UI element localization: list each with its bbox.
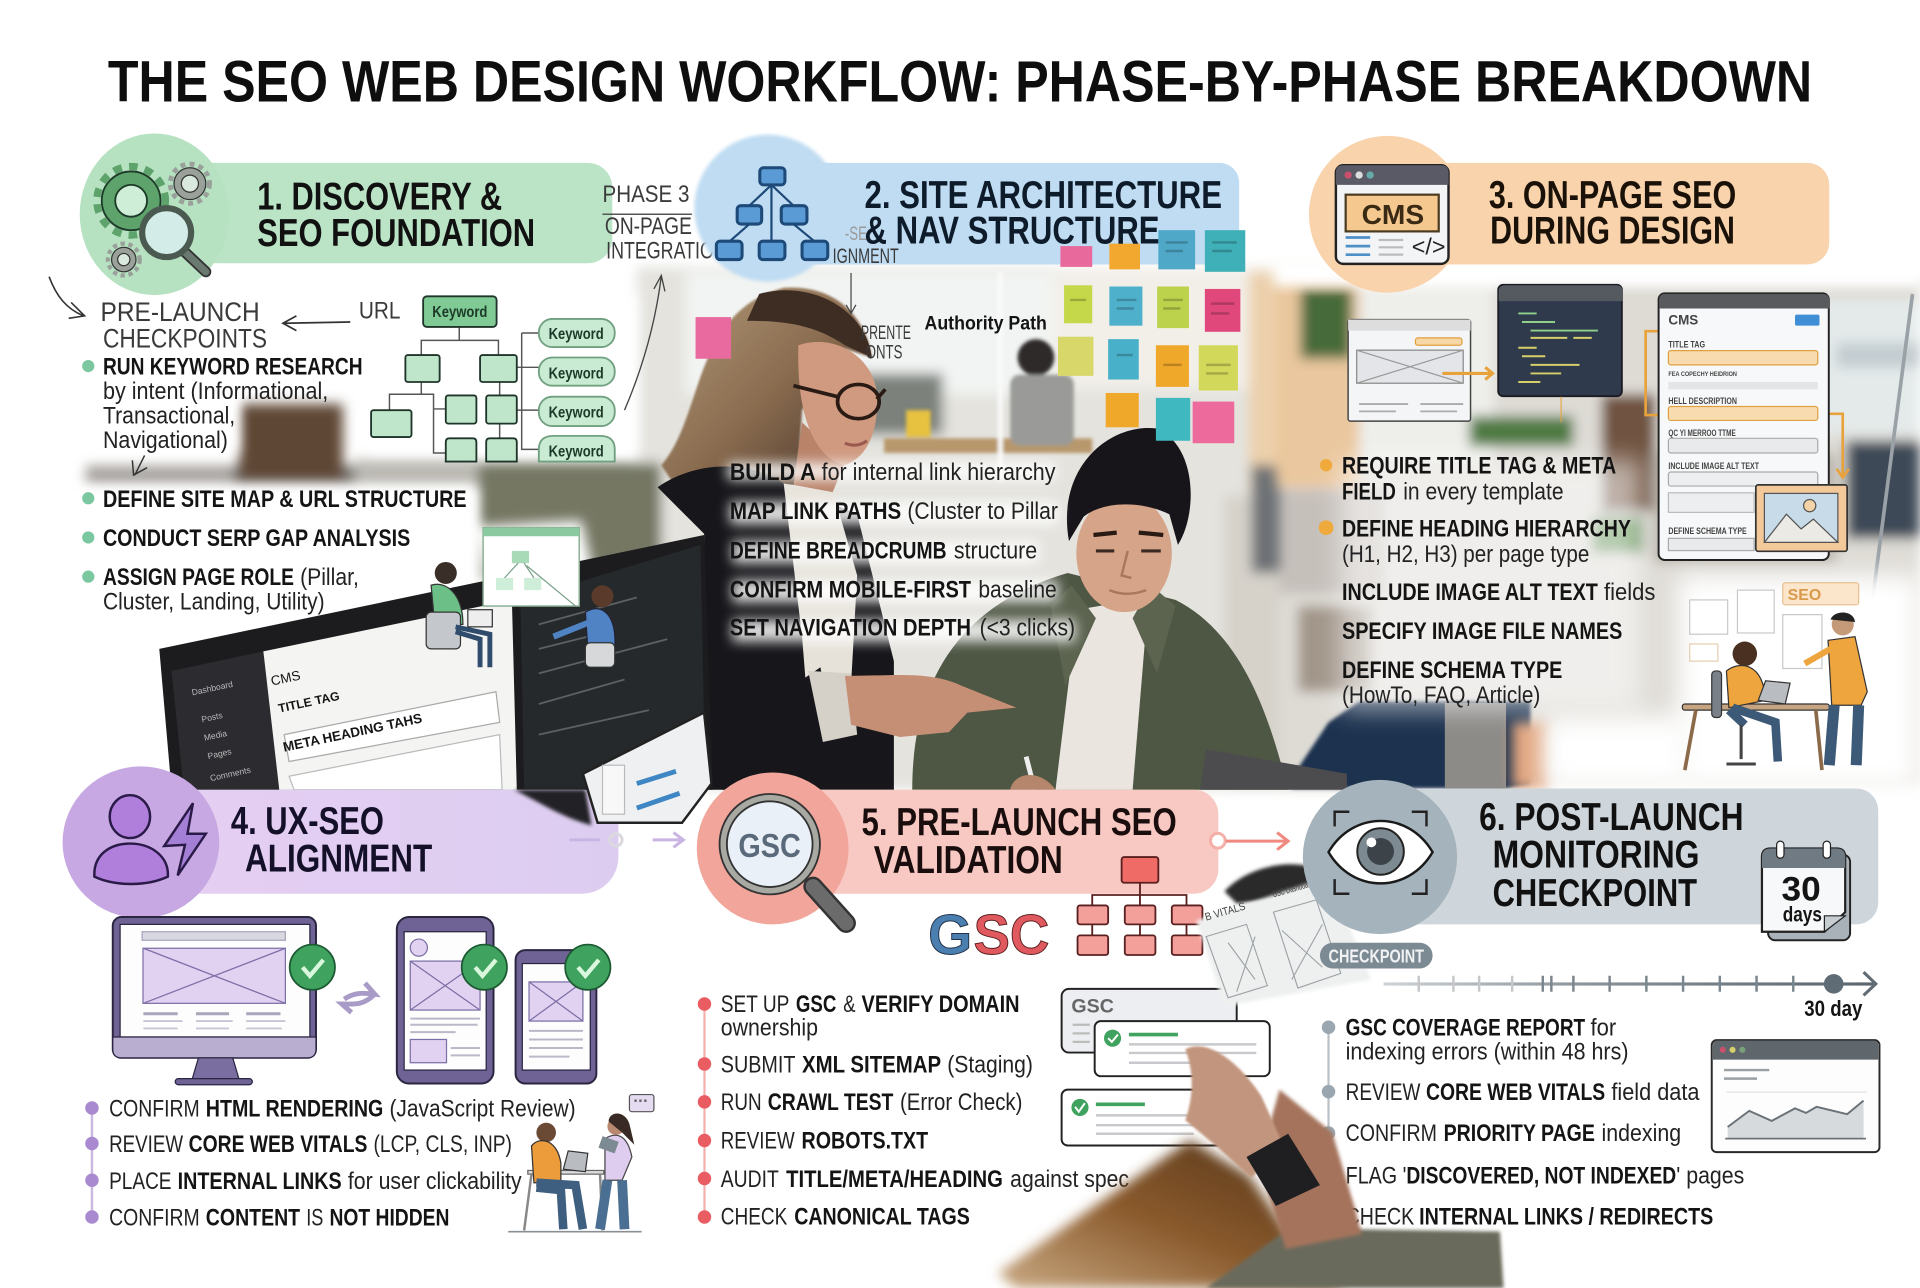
checklist xyxy=(730,459,1075,641)
checklist xyxy=(82,354,467,616)
photo: pointing arm xyxy=(722,667,1016,790)
checklist: CHECK xyxy=(1346,1203,1415,1230)
checklist: in every template xyxy=(1403,478,1564,505)
heading: 4. UX-SEO xyxy=(231,800,384,843)
CMS form window: TITLE TAG xyxy=(1668,340,1705,350)
checkpoint tag xyxy=(1320,943,1433,968)
checklist: AUDIT xyxy=(721,1166,779,1193)
checklist: CONFIRM MOBILE-FIRST xyxy=(730,576,971,603)
checklist: CORE WEB VITALS xyxy=(1426,1079,1605,1106)
phase 1 header band xyxy=(80,133,612,295)
wooden table xyxy=(998,1140,1347,1288)
handwritten fragments: ONTS xyxy=(866,342,902,364)
heading: ALIGNMENT xyxy=(245,838,432,881)
checklist: DEFINE HEADING HIERARCHY xyxy=(1342,515,1631,542)
checklist xyxy=(85,1096,576,1232)
GSC logo text xyxy=(928,903,1049,966)
checklist: REVIEW xyxy=(1346,1079,1421,1106)
monitor with CMS and code xyxy=(159,535,713,790)
handwritten fragments: IGNMENT xyxy=(833,245,899,268)
checklist: PLACE xyxy=(109,1168,172,1195)
heading xyxy=(257,175,535,255)
checklist: DEFINE SITE MAP & URL STRUCTURE xyxy=(103,486,467,513)
icon: desktop monitor wireframe xyxy=(113,917,316,1085)
checklist: baseline xyxy=(978,576,1057,603)
heading: SEO FOUNDATION xyxy=(257,212,535,255)
checklist: DEFINE BREADCRUMB xyxy=(730,537,947,564)
code window xyxy=(1498,285,1622,396)
authority path label: Authority Path xyxy=(924,313,1047,334)
handwritten fragments xyxy=(833,223,911,364)
icon: GSC magnifier xyxy=(720,794,846,923)
CMS form window xyxy=(1659,293,1829,560)
GSC logo text: SC xyxy=(973,903,1049,966)
CMS form window: CMS xyxy=(1668,312,1698,327)
heading: 1. DISCOVERY & xyxy=(257,175,502,218)
checklist: FIELD xyxy=(1342,478,1396,505)
checklist: (Staging) xyxy=(947,1052,1033,1079)
checklist: for internal link hierarchy xyxy=(822,459,1056,486)
icon: 30 days calendar xyxy=(1762,841,1850,940)
checklist: (Error Check) xyxy=(900,1089,1022,1116)
checklist: VERIFY DOMAIN xyxy=(862,991,1020,1018)
checklist: ownership xyxy=(721,1014,818,1041)
GSC report cards xyxy=(1062,989,1270,1145)
checklist: PRIORITY PAGE xyxy=(1444,1120,1595,1147)
handwritten pre-launch note: CHECKPOINTS xyxy=(103,324,267,354)
illustration: two people with desk and documents xyxy=(1682,583,1867,770)
checklist: TITLE/META/HEADING xyxy=(786,1166,1003,1193)
sketch paper with wireframes: B VITALS xyxy=(1204,901,1247,924)
heading: DURING DESIGN xyxy=(1490,210,1735,253)
keyword tree diagram: Keyword xyxy=(432,304,487,321)
timeline to 30 days: 30 day xyxy=(1804,996,1863,1021)
small laptop fragment over band 4 xyxy=(514,713,711,825)
panel 2: site architecture xyxy=(694,135,1245,641)
checklist: fields xyxy=(1604,579,1655,606)
analytics window with line chart xyxy=(1712,1040,1879,1152)
icon: small phone wireframe xyxy=(516,950,596,1084)
CMS form window: INCLUDE IMAGE ALT TEXT xyxy=(1668,461,1759,471)
checklist: NOT HIDDEN xyxy=(329,1205,449,1232)
handwritten phase 3 note: PHASE 3 xyxy=(602,181,689,208)
checklist: Cluster, Landing, Utility) xyxy=(103,589,325,616)
checklist xyxy=(1319,452,1655,709)
handwritten phase 3 note xyxy=(602,181,714,264)
monitor with CMS and code: Comments xyxy=(209,765,252,783)
CMS form window: DEFINE SCHEMA TYPE xyxy=(1668,526,1747,536)
handwritten phase 3 note: ON-PAGE xyxy=(605,213,692,240)
checklist: DEFINE SCHEMA TYPE xyxy=(1342,657,1562,684)
checklist xyxy=(1322,1014,1744,1230)
sketch paper with wireframes xyxy=(1196,864,1371,1006)
monitor with CMS and code: Pages xyxy=(207,746,232,761)
icon: gears and magnifier xyxy=(97,164,209,275)
illustration: two people at a whiteboard xyxy=(426,528,615,667)
CMS form window: FEA COPECHY HEIDRION xyxy=(1668,371,1737,378)
checklist: field data xyxy=(1611,1079,1700,1106)
checklist: CONDUCT SERP GAP ANALYSIS xyxy=(103,525,410,552)
keyword tree diagram: Keyword xyxy=(549,444,604,461)
monitor with CMS and code: META HEADING TAHS xyxy=(282,711,423,755)
photo: office background xyxy=(86,267,1353,790)
checklist xyxy=(698,991,1129,1230)
checklist: DISCOVERED, NOT INDEXED xyxy=(1406,1163,1676,1190)
handwritten pre-launch note: PRE-LAUNCH xyxy=(101,297,260,327)
panel 3: on-page seo xyxy=(1309,136,1867,770)
icon: CMS window: CMS xyxy=(1362,199,1424,230)
checklist: by intent (Informational, xyxy=(103,378,328,405)
checklist: BUILD A xyxy=(730,459,816,486)
panel 1: discovery xyxy=(49,133,714,667)
handwritten fragments: -SE xyxy=(845,223,867,245)
photo: right lounge area xyxy=(1276,279,1920,784)
photo: man at desk xyxy=(912,428,1347,790)
checklist: SUBMIT xyxy=(721,1052,795,1079)
site tree in red xyxy=(1078,857,1202,955)
checklist: (HowTo, FAQ, Article) xyxy=(1342,682,1540,709)
handwritten phase 3 note: INTEGRATIO xyxy=(606,237,714,264)
arrow: to phase 6 xyxy=(1210,833,1288,850)
sketch paper with wireframes: GSC Dashboard xyxy=(1271,878,1314,900)
handwritten pre-launch note: URL xyxy=(359,297,400,324)
checklist: Transactional, xyxy=(103,403,235,430)
checklist: CONFIRM xyxy=(109,1096,200,1123)
checklist: CANONICAL TAGS xyxy=(794,1203,970,1230)
heading: 3. ON-PAGE SEO xyxy=(1489,174,1736,217)
checklist: (JavaScript Review) xyxy=(389,1096,576,1123)
panel 5: pre-launch validation xyxy=(697,773,1371,1288)
white fade behind center list xyxy=(727,463,1075,642)
checklist: (H1, H2, H3) per page type xyxy=(1342,541,1589,568)
icon: CMS window xyxy=(1336,165,1449,264)
phase 5 header band xyxy=(697,773,1218,924)
heading xyxy=(862,801,1177,882)
checklist: ASSIGN PAGE ROLE xyxy=(103,564,294,591)
icon: 30 days calendar: days xyxy=(1783,904,1822,927)
checklist: (Pillar, xyxy=(300,564,359,591)
checklist: CONFIRM xyxy=(109,1205,200,1232)
checklist: structure xyxy=(954,537,1037,564)
checklist: CRAWL TEST xyxy=(768,1089,893,1116)
handwritten pre-launch note xyxy=(49,275,665,475)
photo: hand with watch and forearm xyxy=(1185,1046,1504,1288)
icons: green checks xyxy=(290,945,610,990)
image thumbnail card xyxy=(1756,485,1847,551)
heading xyxy=(231,800,432,881)
checklist: SET NAVIGATION DEPTH xyxy=(730,614,971,641)
monitor with CMS and code: TITLE TAG xyxy=(277,689,341,715)
photo: blue jacket at lower right xyxy=(1292,702,1549,788)
heading xyxy=(1479,796,1744,915)
GSC report cards: GSC xyxy=(1071,996,1114,1018)
handwritten fragments: PRENTE xyxy=(861,322,911,344)
checklist: INTERNAL LINKS xyxy=(178,1168,342,1195)
checklist: GSC xyxy=(796,991,836,1018)
heading: CHECKPOINT xyxy=(1493,872,1697,915)
icon: CMS window: </> xyxy=(1412,234,1445,260)
heading: & NAV STRUCTURE xyxy=(865,210,1160,253)
panel 6: post-launch monitoring xyxy=(1303,780,1879,1230)
orange connector lines xyxy=(1561,331,1849,477)
heading: MONITORING xyxy=(1493,834,1699,877)
photo: woman with glasses xyxy=(658,287,894,790)
checklist: RUN xyxy=(721,1089,762,1116)
checklist: RUN KEYWORD RESEARCH xyxy=(103,354,363,381)
checklist: GSC COVERAGE REPORT xyxy=(1346,1014,1585,1041)
heading: 5. PRE-LAUNCH SEO xyxy=(862,801,1177,844)
monitor with CMS and code: Posts xyxy=(200,710,224,724)
keyword tree diagram: Keyword xyxy=(549,326,604,343)
white fade behind right side xyxy=(1273,257,1920,790)
icon: GSC magnifier: GSC xyxy=(738,828,801,865)
checklist: INTERNAL LINKS / REDIRECTS xyxy=(1419,1203,1713,1230)
CMS form window: HELL DESCRIPTION xyxy=(1668,396,1737,406)
wireframe window xyxy=(1348,320,1471,421)
checklist: for xyxy=(1591,1014,1616,1041)
arrow: wireframe to code xyxy=(1442,367,1493,380)
heading: 2. SITE ARCHITECTURE xyxy=(865,174,1222,217)
phase 4 header band xyxy=(63,766,618,918)
phase 6 header band xyxy=(1303,780,1878,934)
checklist: (LCP, CLS, INP) xyxy=(374,1131,512,1158)
checklist: & xyxy=(843,991,855,1018)
heading xyxy=(1489,174,1736,253)
monitor with CMS and code: Dashboard xyxy=(191,679,234,697)
checklist: REQUIRE TITLE TAG & META xyxy=(1342,452,1616,479)
CMS form window: QC YI MERROO TTME xyxy=(1668,428,1736,438)
illustration: two people with desk and documents: SEO xyxy=(1788,587,1821,604)
heading: 6. POST-LAUNCH xyxy=(1479,796,1744,839)
monitor with CMS and code: Media xyxy=(203,728,228,743)
panel 4: ux-seo alignment xyxy=(63,766,683,1232)
checklist: CORE WEB VITALS xyxy=(189,1131,367,1158)
icon: 30 days calendar: 30 xyxy=(1782,871,1821,909)
checklist: indexing errors (within 48 hrs) xyxy=(1346,1039,1628,1066)
checklist: indexing xyxy=(1602,1120,1681,1147)
checklist: against spec xyxy=(1010,1166,1129,1193)
icon: swap arrows xyxy=(342,983,375,1013)
icon: person and bolt xyxy=(94,795,206,884)
checklist: CONFIRM xyxy=(1346,1120,1437,1147)
icon: eye with focus brackets xyxy=(1329,812,1433,894)
GSC logo text: G xyxy=(928,903,972,966)
checklist: IS xyxy=(306,1205,323,1232)
checklist: CHECK xyxy=(721,1203,788,1230)
checklist: (<3 clicks) xyxy=(980,614,1075,641)
checklist: SPECIFY IMAGE FILE NAMES xyxy=(1342,618,1622,645)
heading xyxy=(865,174,1222,253)
checklist: ROBOTS.TXT xyxy=(802,1127,928,1154)
arrow: to phase 5 xyxy=(569,833,683,847)
checklist: ' pages xyxy=(1676,1163,1744,1190)
checklist: SET UP xyxy=(721,991,789,1018)
phase 3 header band xyxy=(1309,136,1829,293)
checklist: INCLUDE IMAGE ALT TEXT xyxy=(1342,579,1598,606)
monitor with CMS and code: CMS xyxy=(269,668,302,689)
checklist: Navigational) xyxy=(103,427,228,454)
checklist: REVIEW xyxy=(721,1127,795,1154)
keyword tree diagram xyxy=(371,296,615,462)
icon: site tree xyxy=(716,168,828,260)
checklist: for user clickability xyxy=(348,1168,522,1195)
checklist: HTML RENDERING xyxy=(206,1096,383,1123)
illustration: two people talking at a table xyxy=(508,1095,654,1232)
checklist: (Cluster to Pillar xyxy=(907,498,1058,525)
checklist: FLAG ' xyxy=(1346,1163,1406,1190)
checklist: CONTENT xyxy=(206,1205,300,1232)
icon: phone wireframe xyxy=(397,917,494,1084)
phase 2 header band xyxy=(694,135,1239,282)
checklist: XML SITEMAP xyxy=(802,1052,941,1079)
keyword tree diagram: Keyword xyxy=(549,404,604,421)
sticky notes wall xyxy=(696,230,1245,443)
checklist: REVIEW xyxy=(109,1131,184,1158)
timeline to 30 days xyxy=(1384,972,1876,1021)
keyword tree diagram: Keyword xyxy=(549,365,604,382)
checklist: MAP LINK PATHS xyxy=(730,498,901,525)
heading: VALIDATION xyxy=(874,839,1063,882)
checkpoint tag: CHECKPOINT xyxy=(1329,945,1425,966)
white fade patches around text xyxy=(74,294,637,673)
